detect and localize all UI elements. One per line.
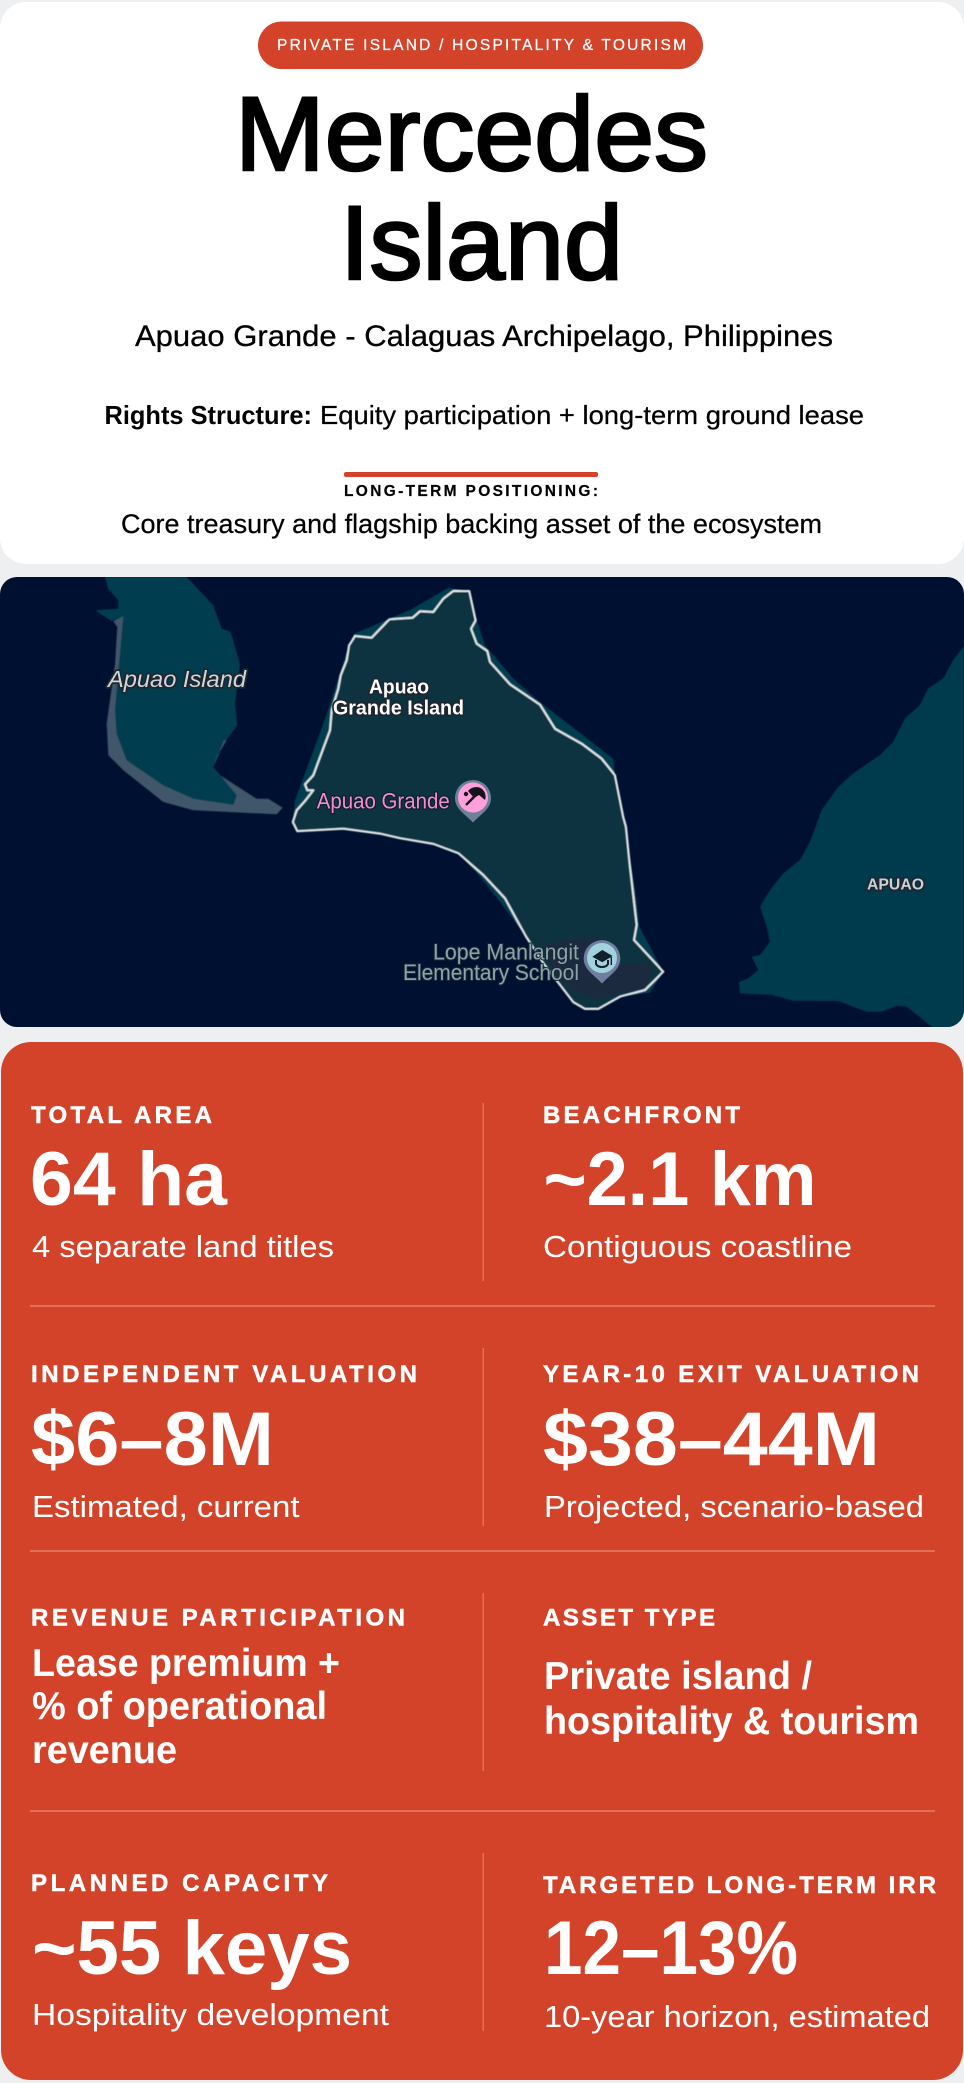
stat: revenue participation: Lease premium + (32, 1642, 340, 1685)
map label: APUAO: APUAO (867, 876, 924, 893)
stat: beachfront: BEACHFRONT (543, 1102, 740, 1129)
map label: Lope Manlangit Elementary School (403, 939, 579, 985)
stat: targeted long-term IRR: TARGETED LONG-TERM IRR (543, 1872, 936, 1899)
stat: beachfront: ~2.1 km (544, 1137, 816, 1222)
red accent bar (344, 472, 598, 477)
title: Mercedes (235, 76, 708, 193)
stat: total area: TOTAL AREA (31, 1102, 212, 1129)
stat: year-10 exit valuation: $38–44M (543, 1397, 880, 1482)
panel: map (0, 577, 964, 1028)
category pill: PRIVATE ISLAND / HOSPITALITY & TOURISM (277, 37, 686, 54)
map: Apuao Grande island (293, 588, 663, 1009)
stat: asset type: hospitality & tourism (544, 1700, 919, 1743)
category pill (258, 22, 703, 69)
stat: asset type: ASSET TYPE (543, 1604, 715, 1632)
map: Apuao Island landmass (95, 577, 283, 814)
stat: revenue participation (31, 1604, 405, 1772)
stat: planned capacity (31, 1870, 389, 2032)
map: eastern landmass (739, 646, 964, 1028)
panel: header card (0, 2, 964, 564)
stat: targeted long-term IRR: 10-year horizon, estimated (544, 1999, 930, 2034)
stat: total area (30, 1102, 334, 1264)
stat: targeted long-term IRR (543, 1872, 936, 2034)
stat: revenue participation: revenue (32, 1729, 177, 1772)
long-term positioning label: LONG-TERM POSITIONING: (344, 483, 598, 500)
map label: Apuao Grande Island: Grande Island (333, 697, 464, 719)
stat: targeted long-term IRR: 12–13% (544, 1906, 798, 1991)
icon: school map pin (584, 940, 620, 984)
rights structure (104, 400, 864, 430)
stat: planned capacity: Hospitality development (32, 1997, 389, 2032)
stat: total area: 64 ha (30, 1137, 228, 1222)
stat: year-10 exit valuation: YEAR-10 EXIT VALUATION (543, 1361, 919, 1388)
long-term positioning text: Core treasury and flagship backing asset of the ecosystem (121, 509, 822, 539)
stat: beachfront: Contiguous coastline (543, 1229, 852, 1264)
stat: independent valuation (31, 1361, 417, 1524)
stat: planned capacity: PLANNED CAPACITY (31, 1870, 328, 1897)
map label: Apuao Grande Island: Apuao (369, 677, 429, 699)
stat: total area: 4 separate land titles (32, 1229, 334, 1264)
map label: Lope Manlangit Elementary School: Lope Manlangit (433, 939, 579, 964)
stat: asset type: Private island / (544, 1655, 812, 1698)
map label: Apuao Grande: Apuao Grande (317, 789, 450, 814)
map label: Apuao Grande Island (333, 677, 464, 719)
rights structure: Equity participation + long-term ground lease (320, 400, 864, 430)
stat: year-10 exit valuation: Projected, scenario-based (544, 1489, 924, 1524)
stat: independent valuation: Estimated, current (32, 1489, 300, 1524)
title (235, 76, 708, 302)
rights structure: Rights Structure: (104, 400, 312, 430)
panel: key metrics (1, 1042, 963, 2080)
stat: independent valuation: INDEPENDENT VALUATION (31, 1361, 417, 1388)
stat: asset type (543, 1604, 919, 1743)
stat: independent valuation: $6–8M (31, 1397, 274, 1482)
icon: beach umbrella map pin (455, 780, 491, 822)
map label: Apuao Island: Apuao Island (106, 666, 247, 692)
stat: beachfront (543, 1102, 852, 1264)
subtitle: location: Apuao Grande - Calaguas Archipelago, Philippines (135, 320, 833, 353)
stat: revenue participation: % of operational (32, 1685, 327, 1728)
map label: Lope Manlangit Elementary School: Elementary School (403, 960, 579, 985)
stat: year-10 exit valuation (543, 1361, 924, 1524)
stat: planned capacity: ~55 keys (32, 1906, 352, 1991)
stat: revenue participation: REVENUE PARTICIPATION (31, 1604, 405, 1632)
title: Island (340, 185, 623, 302)
